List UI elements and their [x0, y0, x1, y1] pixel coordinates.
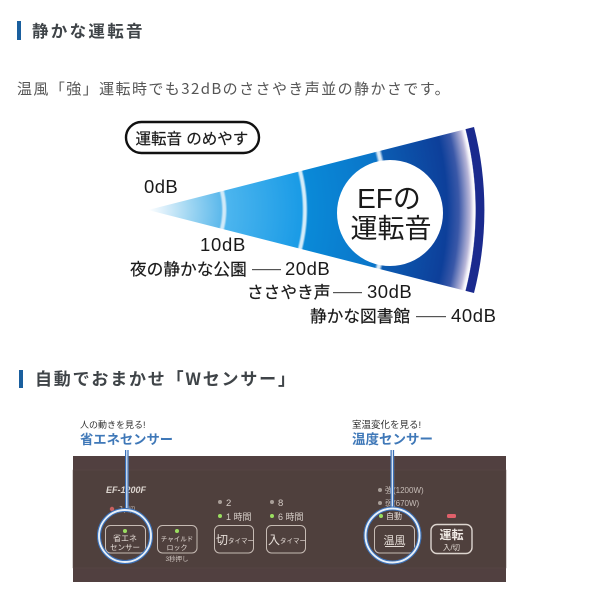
label: whisper 30dB: 30dB — [367, 281, 412, 302]
button: off timer — [214, 526, 254, 553]
indicator: power save: 入/切 — [118, 505, 136, 514]
circle: EF operating sound: 運転音 — [350, 214, 432, 244]
button: warm air — [374, 526, 414, 553]
callout: energy saving sensor label: 人の動きを見る! — [80, 420, 146, 430]
label: whisper 30dB: ささやき声 — [247, 283, 330, 302]
label: quiet library 40dB — [310, 305, 497, 326]
button: warm air: 温風 — [384, 534, 406, 547]
button: on timer: 入 — [268, 533, 280, 547]
timer indicators: off timer — [218, 498, 252, 522]
button: energy saving sensor — [106, 526, 146, 553]
button: energy saving sensor: センサー — [110, 543, 140, 552]
indicator: power save — [110, 505, 136, 514]
label: whisper 30dB — [247, 281, 412, 302]
heat mode indicators: 強(1200W) — [385, 485, 424, 495]
label: quiet park 20dB: 20dB — [285, 258, 330, 279]
callout: temperature sensor label: 室温変化を見る! — [352, 419, 421, 431]
button: on timer — [266, 526, 306, 553]
button: on timer: タイマー — [280, 536, 306, 545]
label: quiet library 40dB: 40dB — [451, 305, 497, 326]
callout: temperature sensor label: 温度センサー — [352, 432, 433, 447]
model name: EF-1200F — [106, 485, 147, 495]
circle: EF operating sound: EFの — [357, 183, 421, 214]
timer indicators: on timer: 6 時間 — [278, 512, 304, 522]
badge: noise guide — [126, 122, 259, 153]
circle: EF operating sound — [337, 160, 443, 266]
callout: temperature sensor label — [352, 419, 433, 447]
callout: energy saving sensor label — [80, 420, 173, 447]
timer indicators: off timer: 2 — [226, 498, 231, 509]
callout: energy saving sensor label: 省エネセンサー — [80, 432, 173, 447]
heat mode indicators: 自動 — [386, 511, 402, 521]
button: energy saving sensor: 省エネ — [113, 533, 137, 543]
button: off timer: 切 — [216, 533, 228, 547]
sensor marker: energy saving — [98, 450, 152, 564]
label: quiet park 20dB — [130, 258, 330, 279]
button: child lock: ロック — [166, 544, 188, 552]
button: child lock: チャイルド — [161, 535, 193, 543]
label: 10dB: 10dB — [200, 234, 246, 255]
button: child lock: 3秒押し — [165, 554, 189, 563]
timer indicators: off timer: 1 時間 — [226, 512, 252, 522]
timer indicators: on timer: 8 — [278, 498, 283, 509]
button: child lock — [158, 526, 197, 563]
button: power: 運転 — [439, 527, 464, 542]
heat mode indicators — [378, 485, 424, 521]
body text: 温風「強」運転時でも32dBのささやき声並の静かさです。 — [17, 78, 451, 99]
heading: quiet operation: 静かな運転音 — [32, 18, 145, 42]
timer indicators: on timer — [270, 498, 304, 522]
label: quiet library 40dB: 静かな図書館 — [310, 307, 410, 326]
control panel — [73, 456, 506, 582]
button: off timer: タイマー — [228, 536, 254, 545]
chart: noise level fan — [148, 127, 484, 293]
heading: W sensor: 自動でおまかせ「Wセンサー」 — [35, 365, 297, 390]
fan wedge — [148, 127, 484, 293]
button: power: 入/切 — [443, 543, 461, 552]
heat mode indicators: 弱(670W) — [385, 499, 420, 508]
button: power — [431, 524, 472, 554]
label: quiet park 20dB: 夜の静かな公園 — [130, 260, 247, 279]
sensor marker: temperature — [364, 450, 421, 564]
label: 0dB: 0dB — [144, 176, 178, 197]
indicator: power lamp — [447, 514, 456, 518]
badge: noise guide: 運転音 のめやす — [136, 130, 248, 148]
